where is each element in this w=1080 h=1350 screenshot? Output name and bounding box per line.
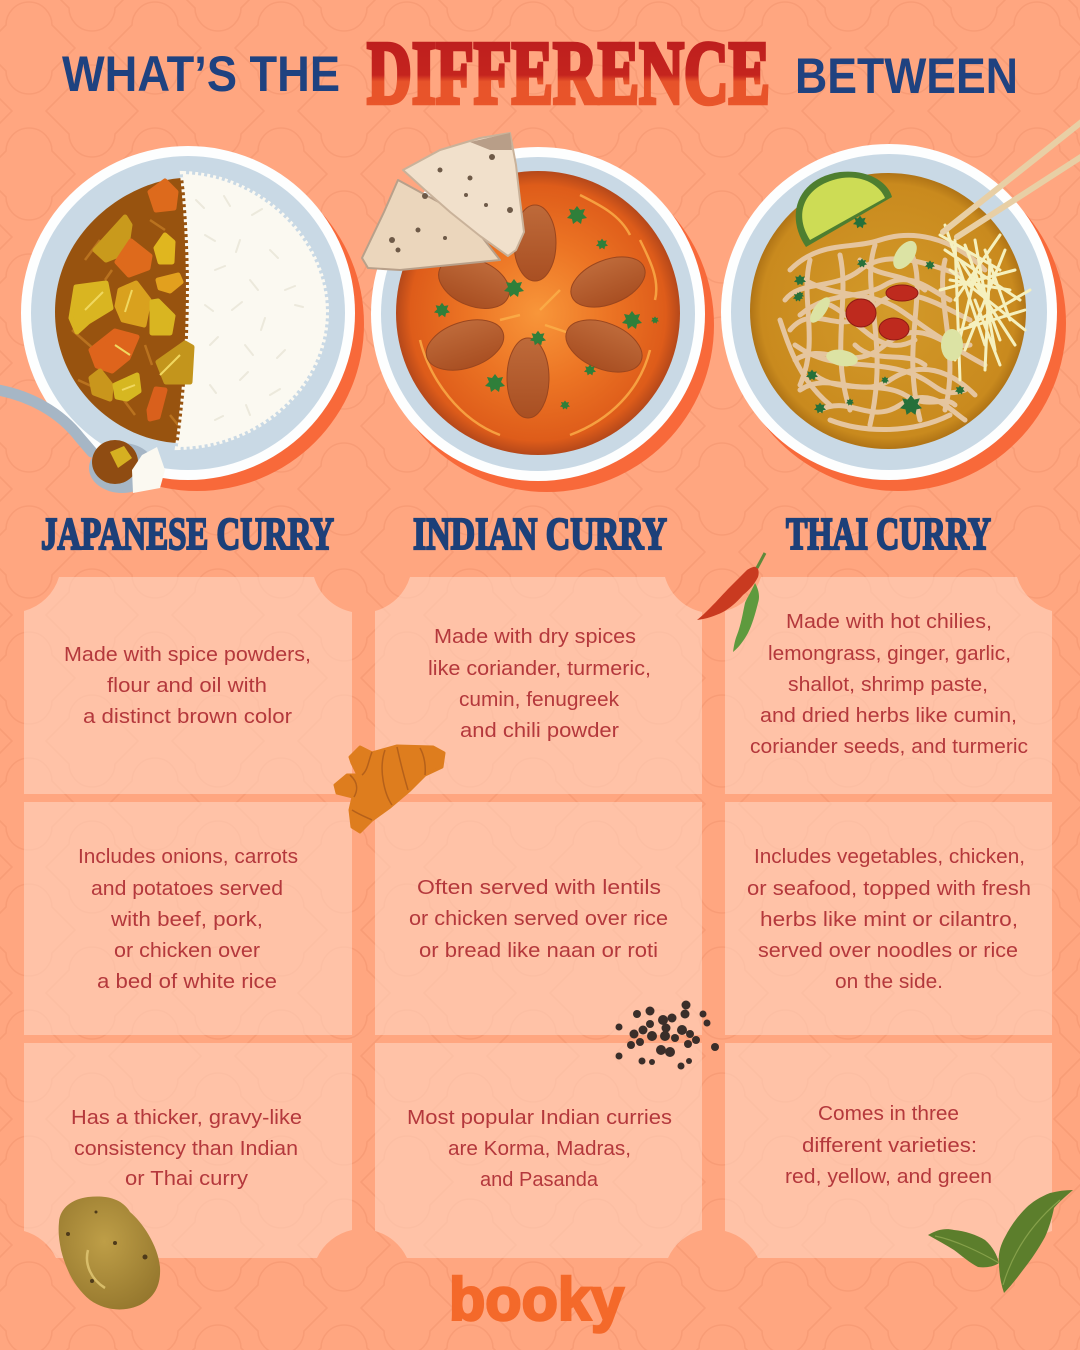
text: Japanese serving: Includes onions, carrots xyxy=(78,846,298,868)
panel: Japanese curry serving xyxy=(24,802,352,1035)
text: Indian varieties: Most popular Indian curries xyxy=(407,1107,672,1129)
text: Indian ingredients: and chili powder xyxy=(460,720,619,742)
text: Thai serving: on the side. xyxy=(835,971,943,993)
panel: Japanese curry consistency xyxy=(24,1043,352,1258)
icon: potato xyxy=(59,1196,160,1309)
text: Thai serving: herbs like mint or cilantro, xyxy=(760,909,1018,931)
text: Indian ingredients: Made with dry spices xyxy=(434,626,636,648)
text: Thai varieties: red, yellow, and green xyxy=(785,1166,992,1188)
bean sprouts xyxy=(940,225,1030,380)
sauce swirls xyxy=(420,195,656,435)
text: Indian serving: or bread like naan or roti xyxy=(419,940,658,962)
title: between: BETWEEN xyxy=(795,48,1018,104)
text: Japanese ingredients: a distinct brown color xyxy=(83,706,292,728)
text: Thai ingredients xyxy=(750,611,1028,758)
text: Thai serving: or seafood, topped with fresh xyxy=(747,878,1031,900)
text: Thai serving: served over noodles or rice xyxy=(758,940,1018,962)
text: Thai varieties xyxy=(785,1103,992,1188)
text: Thai serving: Includes vegetables, chicken, xyxy=(754,846,1025,868)
lime wedge xyxy=(796,172,892,247)
panel: Indian curry varieties xyxy=(375,1043,702,1258)
text: Japanese ingredients: flour and oil with xyxy=(107,675,267,697)
logo: booky: booky xyxy=(449,1266,625,1333)
text: Indian varieties: and Pasanda xyxy=(480,1169,599,1191)
title: difference: DIFFERENCE xyxy=(367,24,770,123)
text: Indian ingredients: cumin, fenugreek xyxy=(459,689,620,711)
text: Thai ingredients: and dried herbs like cumin, xyxy=(760,705,1017,727)
text: Japanese serving: and potatoes served xyxy=(91,878,283,900)
text: Indian serving xyxy=(409,877,668,962)
text: Japanese serving: with beef, pork, xyxy=(110,909,263,931)
text: Japanese consistency: consistency than Indian xyxy=(74,1138,298,1160)
chopsticks xyxy=(943,120,1080,237)
text: Japanese serving: or chicken over xyxy=(114,940,260,962)
panel: Indian curry serving xyxy=(375,802,702,1035)
text: Thai ingredients: lemongrass, ginger, garlic, xyxy=(768,643,1011,665)
lemongrass slices and herbs xyxy=(793,216,965,415)
cilantro garnish xyxy=(434,206,659,410)
text: Japanese consistency: or Thai curry xyxy=(125,1168,248,1190)
icon: turmeric root xyxy=(335,746,444,832)
text: Thai ingredients: coriander seeds, and turmeric xyxy=(750,736,1028,758)
spoon xyxy=(0,390,165,493)
title: what's the: WHAT’S THE xyxy=(62,46,340,102)
noodles xyxy=(780,235,985,430)
text: Japanese ingredients: Made with spice powders, xyxy=(64,644,311,666)
icon: chili peppers xyxy=(697,553,765,652)
heading: Indian curry: INDIAN CURRY xyxy=(413,508,667,559)
text: Indian serving: or chicken served over rice xyxy=(409,908,668,930)
heading: Japanese curry: JAPANESE CURRY xyxy=(41,508,334,559)
chicken pieces xyxy=(420,205,652,418)
text: Indian varieties: are Korma, Madras, xyxy=(448,1138,631,1160)
text: Thai varieties: different varieties: xyxy=(802,1135,977,1157)
curry vegetables xyxy=(71,181,192,419)
panel: Indian curry ingredients xyxy=(375,577,702,794)
text: Indian serving: Often served with lentils xyxy=(417,877,661,899)
text: Indian varieties xyxy=(407,1107,672,1191)
text: Thai varieties: Comes in three xyxy=(818,1103,959,1125)
panel: Thai curry varieties xyxy=(725,1043,1052,1258)
text: Thai ingredients: shallot, shrimp paste, xyxy=(788,674,988,696)
text: Thai ingredients: Made with hot chilies, xyxy=(786,611,992,633)
icon: basil leaves xyxy=(928,1190,1073,1293)
text: Japanese ingredients xyxy=(64,644,311,728)
text: Japanese consistency xyxy=(71,1107,302,1190)
panel: Japanese curry ingredients xyxy=(24,577,352,794)
panel: Thai curry ingredients xyxy=(725,577,1052,794)
curry sauce xyxy=(55,178,192,443)
chili slices xyxy=(846,285,918,340)
plate: Japanese curry with rice xyxy=(0,146,364,493)
text: Indian ingredients: like coriander, turmeric, xyxy=(428,658,651,680)
text: Indian ingredients xyxy=(428,626,651,742)
plate: Thai curry with noodles xyxy=(721,120,1080,491)
text: Japanese serving xyxy=(78,846,298,993)
panel: Thai curry serving xyxy=(725,802,1052,1035)
heading: Thai curry: THAI CURRY xyxy=(786,508,991,559)
text: Japanese serving: a bed of white rice xyxy=(97,971,277,993)
plate: Indian curry with naan xyxy=(362,133,714,492)
naan bread xyxy=(362,133,524,270)
text: Thai serving xyxy=(747,846,1031,993)
rice xyxy=(178,174,326,447)
icon: black peppercorns xyxy=(616,1000,719,1070)
title xyxy=(62,24,1018,123)
text: Japanese consistency: Has a thicker, gravy-like xyxy=(71,1107,302,1129)
